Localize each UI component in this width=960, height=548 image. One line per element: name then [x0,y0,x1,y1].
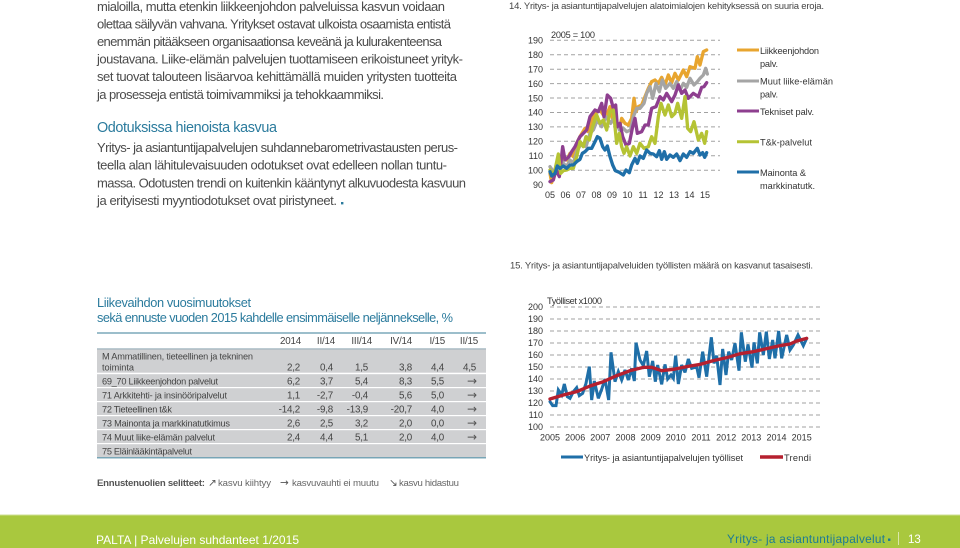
row: 69_70: 5,4 [355,376,369,388]
forecast arrow legend: ↘ [389,477,398,489]
table header row: III/14 [351,336,373,347]
chart legend: employment [561,453,811,463]
row: 71: -2,7 [317,390,333,402]
row: M Ammatillinen: M Ammatillinen, tieteellinen ja tekninen [102,352,253,362]
chart caption 15: 15. Yritys- ja asiantuntijapalveluiden työllisten määrä on kasvanut tasaisesti. [510,260,813,272]
text block: intro paragraph: joustavana. Liike-elämän palvelujen tuottamiseen erikoistuneet yrityk- [96,52,463,66]
line chart: employment 2005-2015: 150 [528,362,543,372]
line chart: sub-sector index 2005-2015: 05 [545,190,555,200]
row: 72: → [467,402,477,416]
line chart: sub-sector index 2005-2015: 2005 = 100 [551,30,595,40]
row: 72: -13,9 [347,404,368,416]
line chart: sub-sector index 2005-2015: 13 [669,190,679,200]
line chart: employment 2005-2015: 100 [528,422,543,432]
row: 69_70: 6,2 [287,376,300,388]
row: 74: 2,4 [287,432,301,444]
row: 73: 0,0 [431,418,445,430]
row: 71: 71 Arkkitehti- ja insinööripalvelut [102,390,227,400]
line chart: employment 2005-2015: 2010 [666,432,686,442]
row: 69_70: 8,3 [399,376,413,388]
row: M Ammatillinen: 0,4 [320,362,334,374]
line chart: sub-sector index 2005-2015 [528,30,720,200]
table header row: I/15 [429,336,446,347]
line chart: employment 2005-2015: 140 [528,374,543,384]
footer publication name: PALTA | Palvelujen suhdanteet 1/2015 [96,533,299,547]
row: 69_70: → [467,374,477,388]
row: M Ammatillinen: toiminta [102,362,135,372]
chart legend: employment: Trendi [784,453,811,463]
row: 72: 72 Tieteellinen t&k [102,404,172,414]
line chart: sub-sector index 2005-2015: 11 [638,190,648,200]
line chart: sub-sector index 2005-2015: 160 [528,79,543,89]
heading: Odotuksissa hienoista kasvua: Odotuksissa hienoista kasvua [97,120,277,136]
forecast arrow legend: → [280,477,289,489]
text block: expectations paragraph: teella alan lähitulevaisuuden odotukset ovat edelleen nollan tuntu- [97,158,447,172]
row: 72: -14,2 [279,404,300,416]
row: 71: -0,4 [352,390,369,402]
text block: intro paragraph: ja prosesseja entistä toimivammiksi ja tehokkaammiksi. [96,87,384,102]
row: M Ammatillinen: 4,4 [431,362,445,374]
row: 74: 74 Muut liike-elämän palvelut [102,432,215,442]
chart legend: sub-sectors: Liikkeenjohdon [760,46,819,56]
table header row: 2014 [280,336,302,347]
row: 74 [102,430,477,444]
row: M Ammatillinen: 3,8 [399,362,413,374]
line chart: sub-sector index 2005-2015: 07 [576,190,586,200]
table header row: II/15 [460,336,479,347]
text block: intro paragraph [96,0,463,102]
row: 71 [102,388,477,402]
footer page number: 13 [908,534,921,546]
line chart: employment 2005-2015: 2006 [565,432,585,442]
row: 74: → [467,430,477,444]
table heading: sekä ennuste vuoden 2015 kahdelle ensimmäiselle neljännekselle, % [97,310,453,325]
row: 69_70 [102,374,477,388]
row: 72: 4,0 [431,404,445,416]
line chart: sub-sector index 2005-2015: 90 [533,180,543,190]
row: 69_70: 5,5 [431,376,445,388]
row: 71: 5,0 [431,390,445,402]
table header row [280,336,479,347]
line chart: employment 2005-2015: 170 [528,338,543,348]
row: 74: 5,1 [355,432,368,444]
row: 73: 3,2 [355,418,368,430]
chart legend: sub-sectors: markkinatutk. [760,181,815,191]
line chart: sub-sector index 2005-2015: 06 [560,190,571,200]
row: M Ammatillinen: 4,5 [463,362,477,374]
line chart: employment 2005-2015: 2009 [641,432,661,442]
line chart: sub-sector index 2005-2015: 150 [528,94,543,104]
table header row: II/14 [317,336,336,347]
chart legend: sub-sectors: Tekniset palv. [760,107,814,117]
line chart: employment 2005-2015: Työlliset x1000 [547,296,602,306]
line chart: employment 2005-2015: 190 [528,314,543,324]
chart legend: sub-sectors [737,46,833,191]
text block: intro paragraph: set tuovat talouteen lisäarvoa kehittämällä muiden yritysten tuotteita [97,69,458,84]
line chart: sub-sector index 2005-2015: 10 [622,190,633,200]
row: 75: 75 Eläinlääkintäpalvelut [102,446,192,456]
forecast arrow legend [97,477,459,489]
text block: expectations paragraph: massa. Odotusten trendi on kuitenkin kääntynyt alkuvuodesta kasvuun [97,176,466,190]
line chart: employment 2005-2015: 2005 [540,432,560,442]
row: 71: 1,1 [287,390,300,402]
chart legend: sub-sectors: palv. [760,59,778,69]
table heading [97,295,453,325]
line chart: sub-sector index 2005-2015: 14 [684,190,695,200]
row: 74: 4,0 [431,432,445,444]
row: M Ammatillinen: 1,5 [355,362,369,374]
row: 69_70: 3,7 [320,376,333,388]
line chart: sub-sector index 2005-2015: 110 [529,151,543,161]
row: 73: 2,5 [320,418,334,430]
table heading: Liikevaihdon vuosimuutokset [97,295,251,310]
row: 72: -9,8 [317,404,334,416]
chart legend: sub-sectors: T&k-palvelut [760,138,812,148]
forecast arrow legend: kasvuvauhti ei muutu [292,478,379,489]
forecast arrow legend: kasvu hidastuu [399,478,459,489]
line chart: sub-sector index 2005-2015: 170 [528,64,543,74]
line chart: employment 2005-2015: 130 [528,386,543,396]
text block: expectations paragraph: Yritys- ja asiantuntijapalvelujen suhdannebarometrivastausten perus- [97,140,458,155]
line chart: sub-sector index 2005-2015: 09 [607,190,617,200]
line chart: employment 2005-2015: 2013 [741,432,761,442]
line chart: sub-sector index 2005-2015: 100 [528,166,543,176]
row: M Ammatillinen: 2,2 [287,362,300,374]
table: turnover changes [97,332,486,458]
line chart: employment 2005-2015 [528,296,823,442]
table header row: IV/14 [390,336,413,347]
text block: expectations paragraph: ja erityisesti myyntiodotukset ovat piristyneet. [96,193,337,208]
line chart: employment 2005-2015: 2008 [615,432,636,442]
row: 72 [102,402,477,416]
footer section name: Yritys- ja asiantuntijapalvelut [727,532,886,546]
line chart: employment 2005-2015: 2015 [792,432,812,442]
line chart: sub-sector index 2005-2015: 15 [700,190,710,200]
row: 73: 73 Mainonta ja markkinatutkimus [102,418,230,428]
text block: expectations paragraph [96,140,466,208]
row: 73: → [467,416,477,430]
line chart: sub-sector index 2005-2015: 180 [528,50,543,60]
line chart: sub-sector index 2005-2015: 08 [591,190,602,200]
footer band [0,514,960,548]
forecast arrow legend: Ennustenuolien selitteet: [97,478,205,489]
line chart: employment 2005-2015: 180 [528,326,543,336]
forecast arrow legend: ↗ [208,477,217,489]
line chart: sub-sector index 2005-2015: 130 [528,122,543,132]
row: 69_70: 69_70 Liikkeenjohdon palvelut [102,376,218,386]
line chart: employment 2005-2015: 2012 [716,432,736,442]
row: M Ammatillinen [102,352,477,374]
line chart: sub-sector index 2005-2015: 140 [528,108,543,118]
row: 71: → [467,388,477,402]
chart caption 14: 14. Yritys- ja asiantuntijapalvelujen alatoimialojen kehityksessä on suuria eroja. [509,1,824,12]
chart legend: sub-sectors: Mainonta & [760,168,806,178]
text block: intro paragraph: olettaa säilyvän vahvana. Yritykset ostavat ulkoista osaamista entistä [97,16,452,32]
line chart: employment 2005-2015: 2007 [590,432,610,442]
row: 72: -20,7 [391,404,412,416]
row: 73: 2,6 [287,418,301,430]
line chart: employment 2005-2015: 200 [528,302,543,312]
text block: intro paragraph: enemmän pitääkseen organisaationsa keveänä ja kulurakenteensa [97,34,443,49]
chart legend: employment: Yritys- ja asiantuntijapalvelujen työlliset [584,453,743,463]
chart legend: sub-sectors: Muut liike-elämän [760,76,833,86]
line chart: sub-sector index 2005-2015: 12 [653,190,664,200]
line chart: employment 2005-2015: 2011 [691,432,711,442]
line chart: employment 2005-2015: 110 [529,410,543,420]
line chart: sub-sector index 2005-2015: 190 [528,36,543,46]
chart legend: sub-sectors: palv. [760,90,778,100]
line chart: employment 2005-2015: 160 [528,350,543,360]
line chart: employment 2005-2015: 2014 [766,432,787,442]
row: 74: 4,4 [320,432,334,444]
line chart: sub-sector index 2005-2015: 120 [528,136,543,146]
line chart: employment 2005-2015: 120 [528,398,543,408]
row: 74: 2,0 [399,432,413,444]
row: 73: 2,0 [399,418,413,430]
forecast arrow legend: kasvu kiihtyy [218,478,271,489]
row: 71: 5,6 [399,390,413,402]
row: 73 [102,416,477,430]
